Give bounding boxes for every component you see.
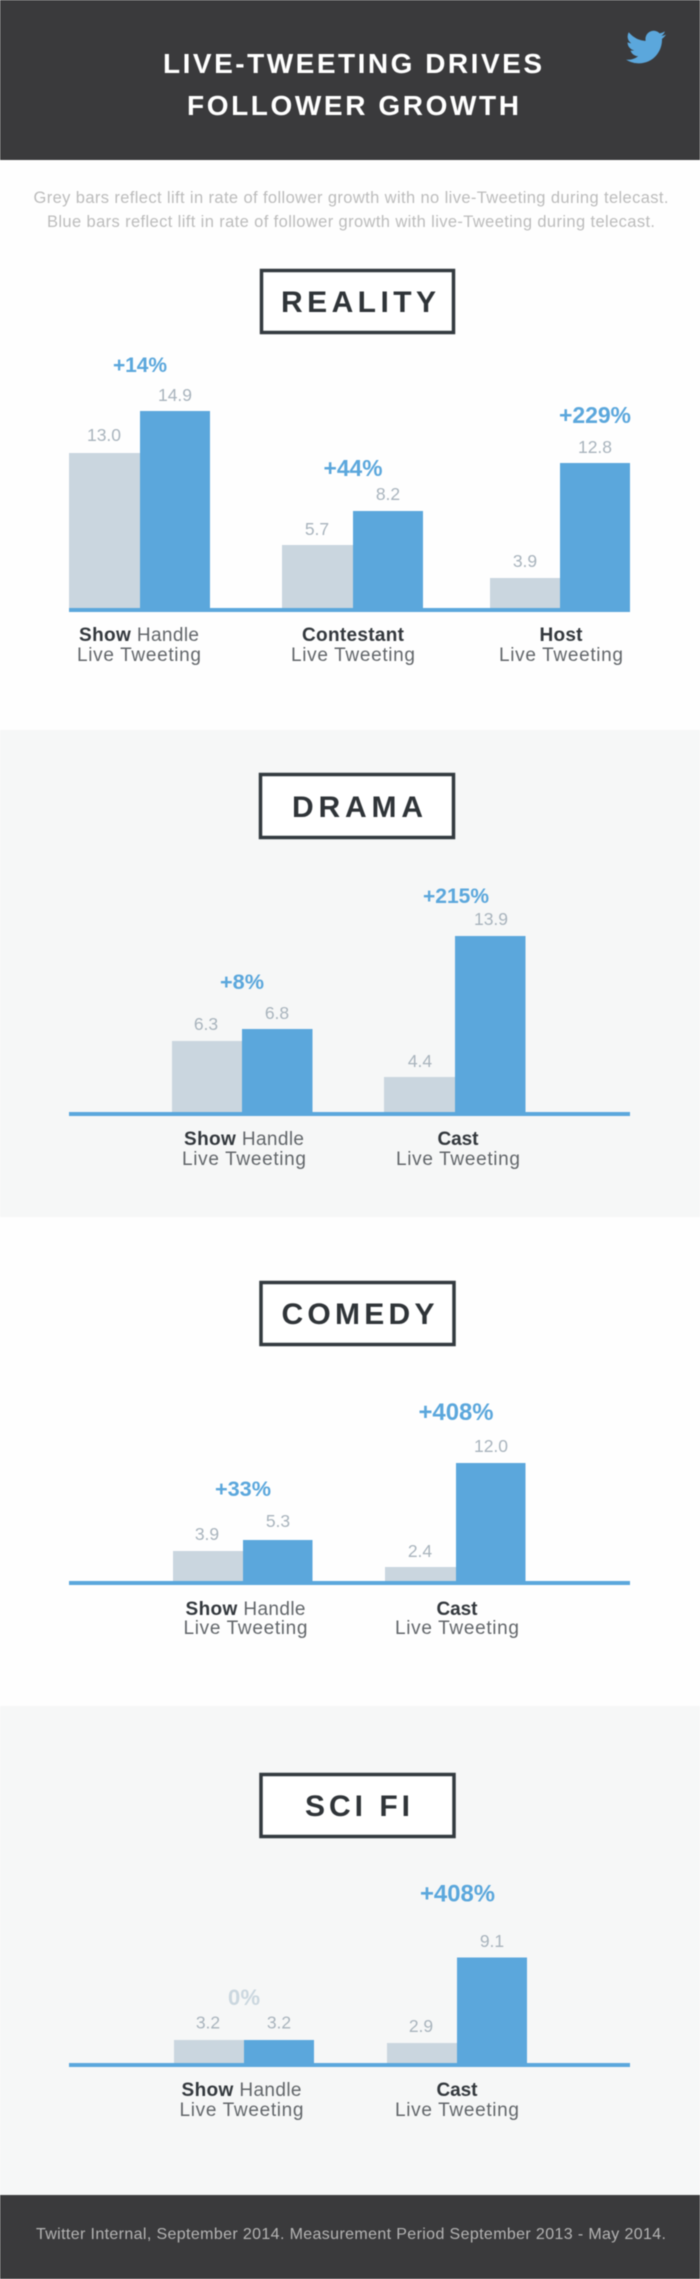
bar chart: reality: 12.8 [578, 437, 612, 457]
bar chart: comedy: +408% [418, 1399, 494, 1426]
category labels: comedy [184, 1599, 519, 1639]
category labels: drama: Show Handle [184, 1129, 304, 1150]
panel: sci fi [69, 1774, 630, 2121]
bar chart: sci fi: 9.1 [480, 1931, 504, 1951]
legend description: Blue bars reflect lift in rate of follower growth with live-Tweeting during telecast. [47, 213, 655, 231]
bar chart: comedy: 2.4 [408, 1541, 432, 1561]
category labels: reality: Show Handle [79, 625, 199, 646]
bar chart: reality: 5.7 [305, 519, 329, 539]
bar chart: comedy [69, 1399, 630, 1585]
footer: Twitter Internal, September 2014. Measurement Period September 2013 - May 2014. [36, 2226, 666, 2243]
panel: drama [69, 774, 630, 1170]
category labels: comedy: Live Tweeting [395, 1618, 519, 1639]
heading: reality [262, 270, 454, 332]
category labels: comedy: Cast [436, 1599, 478, 1620]
bar chart: reality: +44% [324, 455, 382, 481]
category labels: reality: Host [540, 625, 583, 646]
category labels: reality: Live Tweeting [499, 645, 623, 666]
bar chart: comedy: 5.3 [266, 1511, 290, 1531]
title [163, 48, 542, 121]
panel: reality [69, 270, 631, 666]
bar chart: drama [69, 885, 630, 1116]
legend description: Grey bars reflect lift in rate of follower growth with no live-Tweeting during telecast. [34, 189, 668, 207]
bar chart: drama: 4.4 [408, 1051, 432, 1071]
category labels: sci fi: Live Tweeting [180, 2100, 304, 2121]
heading: sci fi [261, 1774, 454, 1836]
category labels: reality: Live Tweeting [291, 645, 415, 666]
heading: comedy [261, 1282, 454, 1344]
category labels: sci fi: Live Tweeting [395, 2100, 519, 2121]
bar chart: sci fi: +408% [420, 1880, 495, 1908]
bar chart: reality: 13.0 [87, 425, 121, 445]
icon: twitter bird [626, 31, 666, 63]
bar chart: reality: 14.9 [158, 385, 192, 405]
bar chart: comedy: +33% [215, 1476, 271, 1501]
bar chart: reality: +14% [113, 354, 167, 377]
category labels: drama: Live Tweeting [182, 1149, 306, 1170]
bar chart: comedy: 12.0 [474, 1436, 508, 1456]
category labels: reality: Live Tweeting [77, 645, 201, 666]
title: FOLLOWER GROWTH [187, 90, 519, 121]
bar chart: drama: +8% [220, 969, 264, 994]
bar chart: sci fi [69, 1880, 630, 2067]
category labels: comedy: Show Handle [186, 1599, 306, 1620]
bar chart: sci fi: 0% [228, 1985, 260, 2010]
bar chart: drama: 6.8 [265, 1003, 289, 1023]
heading: drama: DRAMA [292, 791, 423, 824]
category labels: sci fi [180, 2080, 519, 2121]
bar chart: reality: +229% [559, 402, 631, 428]
footer [0, 2195, 700, 2279]
category labels: reality [77, 625, 623, 666]
header banner [0, 0, 700, 160]
category labels: drama: Cast [438, 1129, 479, 1150]
category labels: drama: Live Tweeting [396, 1149, 520, 1170]
bar chart: drama: 6.3 [194, 1014, 218, 1034]
legend description [34, 189, 668, 231]
panel: comedy [69, 1282, 630, 1639]
bar chart: drama: 13.9 [474, 909, 508, 929]
bar chart: reality [69, 354, 631, 612]
category labels: comedy: Live Tweeting [184, 1618, 308, 1639]
bar chart: sci fi: 3.2 [196, 2012, 220, 2032]
bar chart: comedy: 3.9 [195, 1524, 219, 1544]
category labels: reality: Contestant [302, 625, 405, 646]
heading: reality: REALITY [281, 286, 436, 319]
category labels: drama [182, 1129, 520, 1170]
bar chart: reality: 8.2 [376, 484, 400, 504]
category labels: sci fi: Cast [436, 2080, 478, 2101]
heading: sci fi: SCI FI [305, 1790, 410, 1823]
bar chart: reality: 3.9 [513, 551, 537, 571]
bar chart: drama: +215% [423, 885, 489, 908]
bar chart: sci fi: 3.2 [267, 2012, 291, 2032]
title: LIVE-TWEETING DRIVES [163, 48, 542, 79]
heading: drama [260, 774, 454, 838]
heading: comedy: COMEDY [282, 1298, 434, 1331]
category labels: sci fi: Show Handle [182, 2080, 302, 2101]
bar chart: sci fi: 2.9 [409, 2016, 433, 2036]
